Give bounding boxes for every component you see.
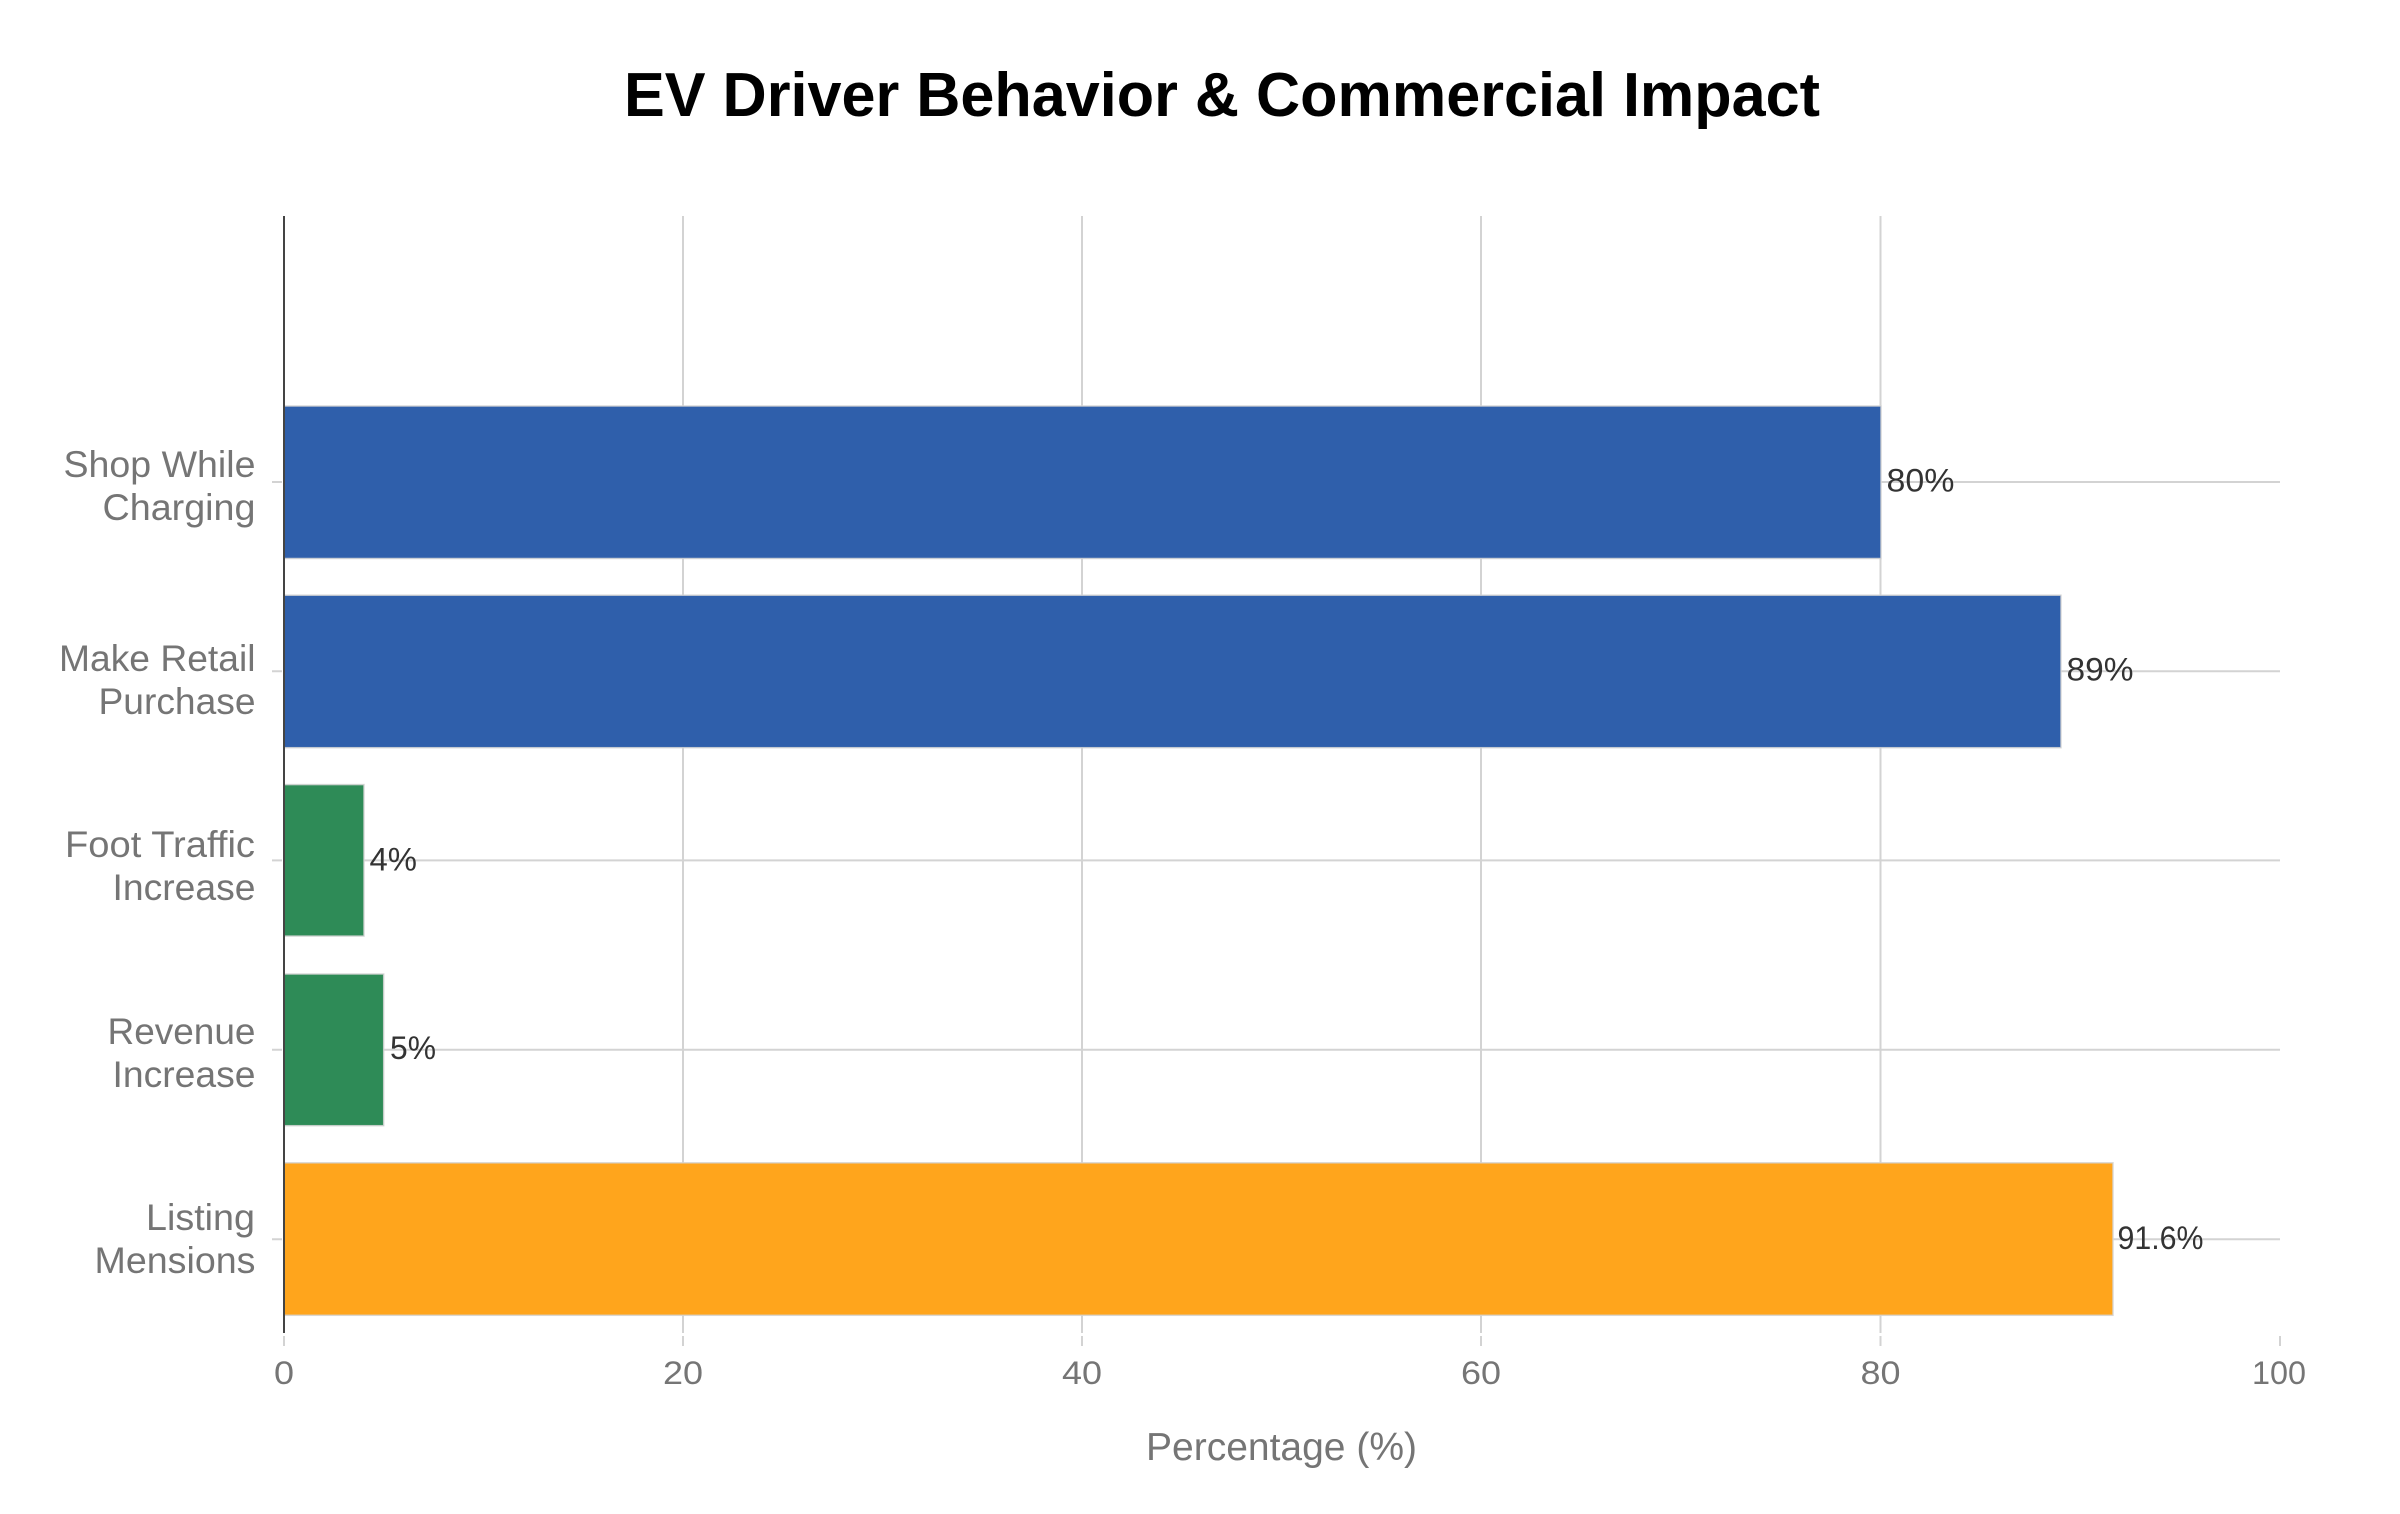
category: Shop While Charging: Shop While	[64, 443, 256, 485]
category: Revenue Increase: Increase	[112, 1053, 256, 1095]
category: Revenue Increase	[108, 1010, 256, 1095]
category: Shop While Charging: Charging	[102, 486, 256, 528]
tick: 80: 80	[1860, 1355, 1900, 1391]
category: Listing Mensions: Listing	[146, 1196, 255, 1238]
value: 80%: 80%	[1886, 462, 1954, 498]
value labels	[370, 462, 2204, 1256]
tick: 60: 60	[1461, 1355, 1501, 1391]
category: Listing Mensions: Mensions	[94, 1239, 256, 1281]
value: 4%: 4%	[370, 842, 417, 878]
tick: 40: 40	[1062, 1355, 1102, 1391]
category: Make Retail Purchase: Make Retail	[59, 637, 256, 679]
tick: 0: 0	[274, 1355, 294, 1391]
category: Foot Traffic Increase	[65, 823, 256, 908]
tick: 100: 100	[2252, 1355, 2306, 1391]
value: 5%: 5%	[390, 1030, 436, 1066]
y axis line	[283, 216, 285, 1333]
y axis category labels	[59, 443, 256, 1281]
category: Make Retail Purchase	[59, 637, 256, 722]
category: Shop While Charging	[64, 443, 256, 528]
x axis tick labels	[274, 1355, 2306, 1391]
category: Make Retail Purchase: Purchase	[98, 680, 256, 722]
value: 91.6%: 91.6%	[2118, 1220, 2204, 1256]
bar chart	[284, 406, 2113, 1315]
bar: Revenue Increase 5%	[284, 974, 384, 1126]
category: Foot Traffic Increase: Foot Traffic	[65, 823, 255, 865]
category: Listing Mensions	[94, 1196, 256, 1281]
bar: Foot Traffic Increase 4%	[284, 785, 364, 936]
bar: Shop While Charging 80%	[284, 406, 1881, 558]
tick: 20: 20	[663, 1355, 703, 1391]
bar: Make Retail Purchase 89%	[284, 595, 2061, 748]
bar: Listing Mensions 91.6%	[284, 1163, 2113, 1315]
category: Foot Traffic Increase: Increase	[112, 866, 256, 908]
title: EV Driver Behavior & Commercial Impact	[624, 61, 1820, 130]
category: Revenue Increase: Revenue	[108, 1010, 256, 1052]
x axis title: Percentage (%)	[1146, 1426, 1417, 1469]
value: 89%: 89%	[2066, 652, 2134, 688]
